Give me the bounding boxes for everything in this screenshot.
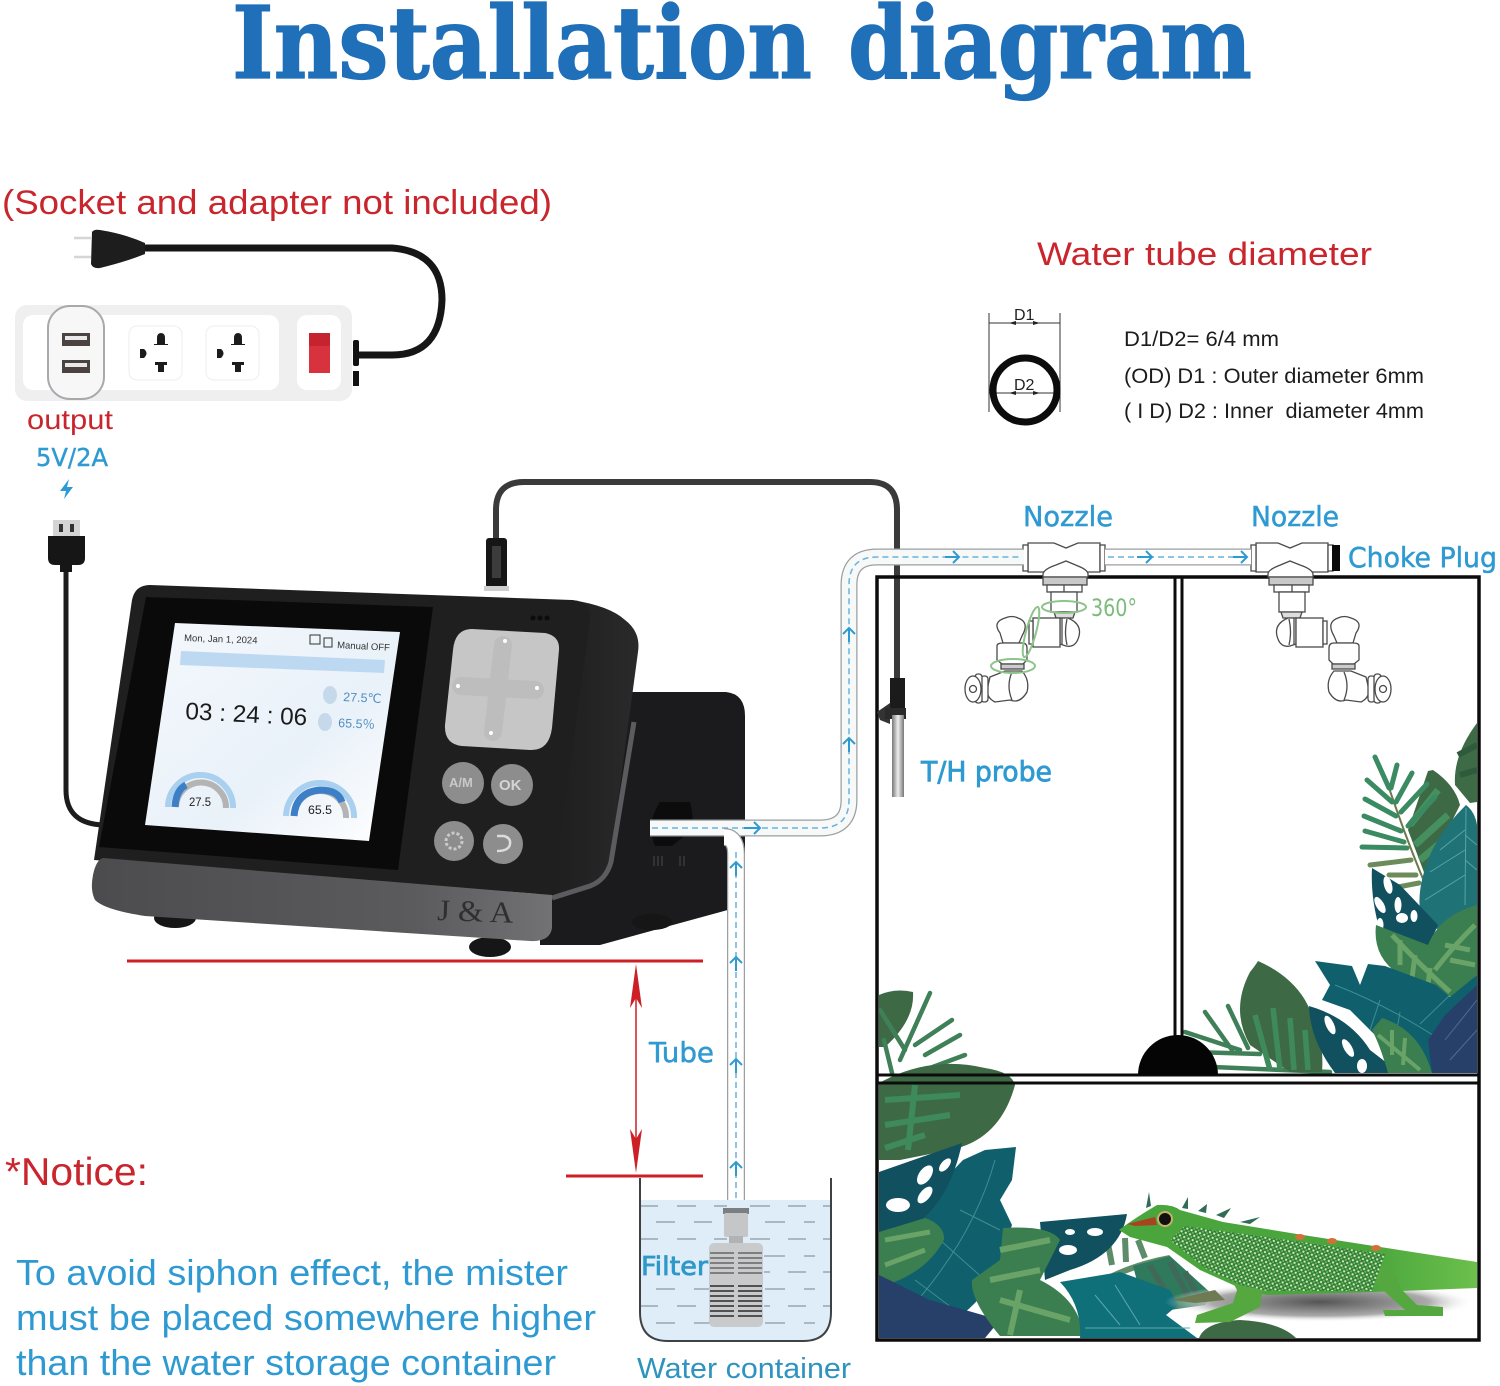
plant: upper left dark leaf — [879, 991, 913, 1047]
note: socket and adapter not included: (Socket and adapter not included) — [2, 184, 552, 222]
lizard eye and marking — [1127, 1211, 1381, 1251]
socket 1 — [129, 326, 182, 380]
diameter specification text — [1124, 328, 1424, 423]
temperature and humidity readouts: 27.5℃ — [343, 690, 382, 706]
plant: lacy leaf — [1372, 868, 1438, 947]
icon: lightning bolt — [60, 479, 73, 499]
cross-section drawing — [989, 307, 1060, 422]
plant: dark bottom leaf — [1199, 1320, 1296, 1338]
date: Mon, Jan 1, 2024 — [184, 633, 258, 647]
controller device — [92, 585, 745, 957]
plant: upper left fern — [880, 993, 965, 1073]
water container with filter — [637, 1178, 851, 1385]
lizard front leg — [1195, 1268, 1263, 1323]
red switch — [309, 333, 330, 373]
plant: lacy leaf left — [879, 1143, 962, 1232]
plant: big lower teal leaf — [894, 1147, 1016, 1310]
notice body text: than the water storage container — [16, 1342, 556, 1383]
socket 2 — [206, 326, 259, 380]
label: tube: Tube — [648, 1036, 714, 1069]
power strip with cord and adapter — [15, 230, 442, 401]
360 degree label: 360° — [1091, 594, 1137, 622]
plant: striped left leaf — [879, 1218, 944, 1287]
cable connector — [484, 538, 509, 591]
strip body — [15, 305, 352, 401]
plant: navy leaf — [1428, 985, 1477, 1073]
heading: water tube diameter: Water tube diameter — [1037, 236, 1372, 272]
far hand — [1172, 1290, 1225, 1303]
terrarium frame — [877, 577, 1479, 1340]
flow arrows — [730, 551, 1247, 1176]
device feet — [154, 908, 672, 957]
terrarium plants — [879, 723, 1477, 1338]
device side panel — [500, 600, 638, 900]
display screen — [145, 623, 400, 841]
power cable from controller to T/H probe — [496, 482, 897, 682]
label: water container: Water container — [637, 1353, 851, 1385]
cross-section drawing: D2 — [1014, 377, 1035, 394]
status bar — [180, 651, 385, 673]
rear box — [540, 692, 745, 945]
tube port — [651, 802, 693, 846]
direction pad — [445, 629, 559, 750]
plant: teal bottom leaf — [1060, 1272, 1197, 1338]
USB adapter — [48, 306, 104, 399]
filter — [709, 1208, 763, 1327]
label: nozzle 1: Nozzle — [1023, 500, 1113, 533]
notice heading: *Notice: — [5, 1151, 148, 1194]
container outline — [640, 1178, 831, 1341]
diameter specification text: (OD) D1 : Outer diameter 6mm — [1124, 365, 1424, 388]
water tube to nozzles — [650, 557, 1251, 828]
nozzle assemblies — [965, 543, 1391, 703]
cross-section drawing: D1 — [1014, 307, 1035, 324]
plant: dark leaf under lizard — [1133, 1256, 1213, 1310]
black half circle vent — [1138, 1035, 1218, 1075]
plant: lower left dark leaf — [879, 1064, 1015, 1160]
button OK: OK — [499, 777, 522, 794]
plant: striped lower leaf — [1372, 1018, 1432, 1073]
notice body text: To avoid siphon effect, the mister — [16, 1252, 568, 1293]
water tube to container — [724, 837, 736, 1210]
button A/M — [442, 762, 484, 804]
lizard shadow — [1165, 1282, 1475, 1322]
USB plug and cable — [48, 520, 104, 825]
notice body text: must be placed somewhere higher — [16, 1297, 596, 1338]
strip cord connector — [353, 340, 359, 386]
labels on the tube run — [648, 500, 1497, 1069]
plant: lacy middle leaf — [1040, 1214, 1127, 1280]
button settings — [434, 821, 474, 861]
button A/M: A/M — [449, 775, 473, 790]
device front face — [94, 585, 590, 895]
water — [641, 1200, 830, 1340]
T/H probe — [877, 678, 906, 797]
lizard — [1119, 1192, 1477, 1323]
screen bezel — [99, 597, 433, 870]
humidity gauge: 65.5 — [308, 803, 332, 817]
5V/2A label: 5V/2A — [36, 443, 108, 472]
button return — [483, 824, 523, 864]
plant: bottom fern — [1185, 1006, 1330, 1072]
plant: striped middle leaf — [972, 1228, 1083, 1336]
temperature gauge — [168, 775, 233, 809]
plant: lacy lower leaf — [1309, 1006, 1388, 1073]
grey base — [92, 858, 552, 941]
side vents text marks — [654, 856, 684, 866]
mode status: Manual OFF — [337, 640, 390, 654]
button OK — [491, 764, 533, 806]
temperature and humidity readouts: 65.5％ — [338, 716, 375, 732]
wall plug — [74, 230, 145, 268]
diameter specification text: ( I D) D2 : Inner diameter 4mm — [1124, 400, 1424, 423]
temperature gauge: 27.5 — [189, 795, 211, 809]
brand logo: J & A — [437, 894, 514, 930]
plant: big teal leaf — [1315, 961, 1477, 1073]
lizard body — [1119, 1205, 1477, 1295]
plant: under-head fern — [1106, 1238, 1170, 1274]
360 degree rotation marks — [991, 601, 1086, 673]
output label: output — [27, 404, 113, 435]
lizard skin texture — [1170, 1226, 1385, 1291]
grey side strip — [552, 722, 634, 898]
power cord — [143, 248, 442, 355]
clock: 03 : 24 : 06 — [185, 698, 308, 731]
plant: navy bottom leaf — [879, 1275, 1000, 1338]
plant: large dark leaf — [1240, 961, 1322, 1072]
nozzle right — [1251, 543, 1391, 703]
label: T/H probe: T/H probe — [920, 755, 1052, 788]
water tube diameter diagram — [989, 236, 1424, 423]
temperature and humidity readouts — [318, 686, 382, 732]
choke plug — [1332, 545, 1340, 571]
plant: striped leaf — [1376, 905, 1477, 997]
label: choke plug: Choke Plug — [1348, 541, 1497, 574]
plant: teal leaf — [1419, 805, 1477, 930]
plant: dark leaf behind fern — [1408, 770, 1460, 875]
label: nozzle 2: Nozzle — [1251, 500, 1339, 533]
mode status — [310, 635, 390, 654]
speaker dots — [530, 616, 550, 620]
height difference markers — [127, 961, 703, 1176]
plant: top right dark leaf — [1455, 723, 1477, 803]
lizard back leg — [1372, 1262, 1443, 1316]
humidity gauge — [286, 783, 354, 818]
notice body text — [16, 1252, 596, 1383]
nozzle left — [965, 543, 1105, 703]
lizard crest — [1146, 1192, 1260, 1224]
plant: top right fern — [1362, 757, 1435, 900]
water dashes — [641, 1206, 830, 1323]
diameter specification text: D1/D2= 6/4 mm — [1124, 328, 1279, 351]
label: filter: Filter — [641, 1252, 708, 1282]
